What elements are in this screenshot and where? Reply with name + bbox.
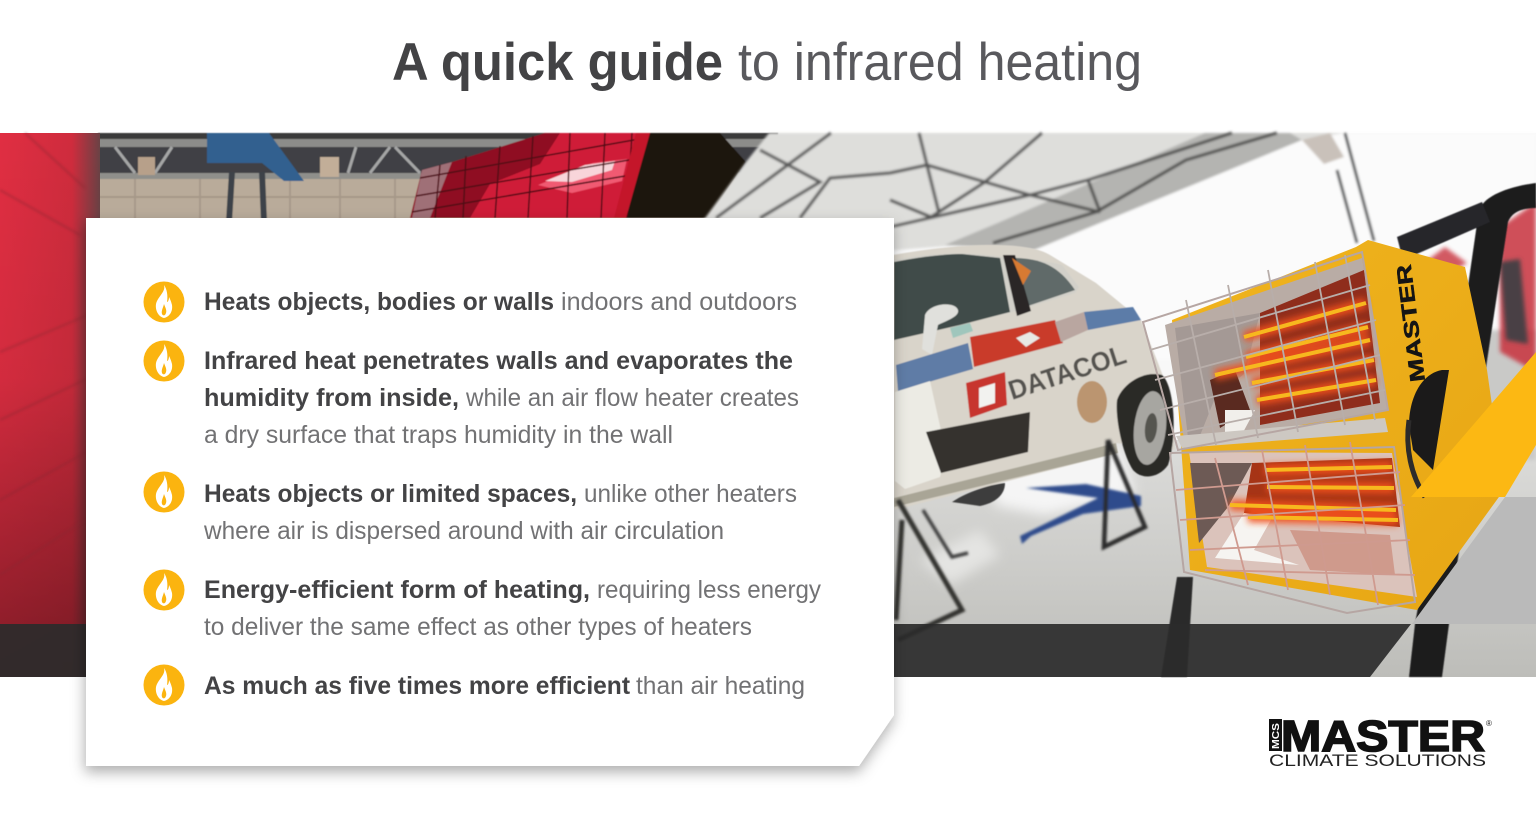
bullet 1 text: Heats objects, bodies or walls <box>204 288 554 316</box>
logo: Master Climate Solutions: ® <box>1486 719 1492 728</box>
icon: flame <box>144 472 184 512</box>
icon: flame <box>144 664 184 706</box>
bullet 2 <box>144 340 799 449</box>
bullet 2 text: while an air flow heater creates <box>465 384 799 412</box>
bullet 1 text: indoors and outdoors <box>561 288 797 316</box>
icon: flame <box>144 570 184 610</box>
bullet 3 text: unlike other heaters <box>584 480 797 508</box>
photo: infrared heater <box>1143 240 1504 613</box>
bullet 2 text <box>204 347 799 449</box>
photo: tent canopy <box>700 133 1536 360</box>
logo: Master Climate Solutions: MASTER <box>1281 712 1485 761</box>
yellow accent shape <box>1411 352 1536 497</box>
title: to infrared heating <box>738 33 1142 92</box>
icon: flame <box>144 282 184 322</box>
photo: rally car <box>893 245 1175 510</box>
white text card <box>86 218 894 766</box>
bullet 2 text: Infrared heat penetrates walls and evaporates the <box>204 347 793 375</box>
wire guards <box>1143 252 1415 613</box>
bullet 2 text: humidity from inside, <box>204 384 459 412</box>
bullet 3 text: where air is dispersed around with air circulation <box>203 517 724 545</box>
title: A quick guide <box>392 33 723 92</box>
grey accent shape <box>1412 497 1536 624</box>
icon: flame <box>144 340 184 382</box>
logo: Master Climate Solutions: CLIMATE SOLUTIONS <box>1269 751 1486 770</box>
bullet 4 text: to deliver the same effect as other types of heaters <box>204 613 752 641</box>
bullet 5 text: As much as five times more efficient <box>204 672 631 700</box>
bullet 1 <box>144 282 797 322</box>
logo: Master Climate Solutions: MCS <box>1271 723 1282 749</box>
photo: red wall <box>0 133 100 677</box>
heater brand: MASTER <box>1393 263 1430 383</box>
bullet 5 text: than air heating <box>636 672 805 700</box>
dark band <box>0 624 1411 677</box>
lower reflector <box>1189 452 1417 597</box>
photo: jack and stands <box>896 440 1145 640</box>
bullet 3 text: Heats objects or limited spaces, <box>204 480 577 508</box>
photo: heater stand legs <box>1161 183 1536 677</box>
photo banner <box>0 133 1536 677</box>
bullet 2 text: a dry surface that traps humidity in the wall <box>204 421 673 449</box>
bullet 4 text: Energy-efficient form of heating, <box>204 576 590 604</box>
heating rods <box>1215 303 1398 520</box>
bullet 4 text <box>204 576 821 641</box>
photo: warehouse background with red heater <box>98 133 778 233</box>
upper reflector <box>1165 258 1388 445</box>
bullet 4 <box>144 570 821 641</box>
bullet 3 <box>144 472 797 545</box>
photo: floor and background <box>894 202 1536 677</box>
bullet 3 text <box>203 480 797 545</box>
bullet 5 <box>144 664 805 706</box>
photo: rally car: DATACOL <box>1005 339 1130 406</box>
bullet 4 text: requiring less energy <box>597 576 821 604</box>
